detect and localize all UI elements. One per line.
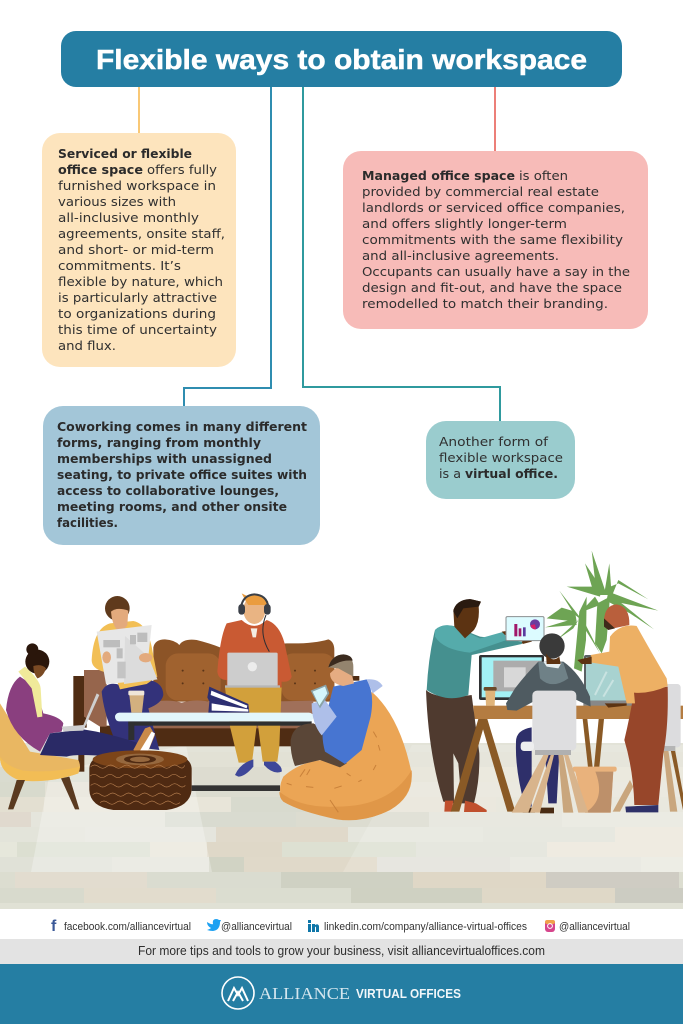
coffee table [115,713,313,791]
panel: virtual office [426,421,575,499]
illustration: lounge group [0,593,412,820]
panel: managed office: design and fit-out, and have the space [362,280,622,295]
panel: coworking: access to collaborative lounges, [57,484,279,498]
plant pot [573,719,617,813]
panel: virtual office: virtual office. [465,467,558,481]
man pointing at chart [426,599,534,812]
panel: serviced office: agreements, onsite staff, [58,226,225,241]
floor [0,743,683,909]
panel: virtual office: Another form of [439,434,549,449]
social links bar: facebook.com/alliancevirtual [64,921,191,933]
panel: coworking: forms, ranging from monthly [57,436,261,450]
panel: coworking: seating, to private office suites with [57,468,307,482]
beanbag with man and tablet [279,654,412,820]
footer with logo: ALLIANCE [259,984,350,1003]
tablet chart [506,617,544,641]
tire ottoman [89,750,192,810]
panel: coworking [43,406,320,545]
illustration: desk group [426,551,683,813]
website call to action [0,939,683,964]
footer with logo: VIRTUAL OFFICES [356,986,461,1001]
desk legs [451,719,515,812]
panel: serviced office: flexible by nature, which [58,274,223,289]
panel: serviced office: this time of uncertainty [58,322,218,337]
social links bar [0,909,683,939]
icon: alliance logo [222,977,254,1009]
sofa [73,639,359,772]
panel: managed office: landlords or serviced office companies, [362,200,625,215]
title banner: Flexible ways to obtain workspace [96,44,587,75]
title banner [61,31,622,87]
panel: serviced office: all-inclusive monthly [58,210,200,225]
second chair [613,684,683,812]
website call to action: For more tips and tools to grow your business, visit alliancevirtualoffices.com [138,944,545,958]
icon: facebook: f [51,918,57,935]
panel: serviced office: commitments. It’s [58,258,181,273]
panel: serviced office: offers fully [147,162,218,177]
panel: managed office: and all-inclusive agreements. [362,248,559,263]
binders [207,687,249,713]
monitor and laptop [479,655,634,706]
panel: managed office: Managed office space [362,169,515,183]
icon: linkedin [308,920,319,932]
panel: serviced office: Serviced or flexible [58,147,192,161]
person: woman with laptop in chair [0,643,155,809]
connector: serviced office line [138,87,140,133]
person: man with headphones and laptop [217,593,292,777]
connector: virtual office line [303,87,500,421]
panel: serviced office: and short- or mid-term [58,242,214,257]
panel: serviced office: to organizations during [58,306,216,321]
panel: managed office [343,151,648,329]
social links bar: linkedin.com/company/alliance-virtual-offices [324,921,527,933]
panel: coworking: Coworking comes in many different [57,420,307,434]
connector: managed office line [494,87,496,151]
seated man with hoodie and chair [506,633,591,813]
panel: managed office: is often [519,168,568,183]
panel: coworking: meeting rooms, and other onsite [57,500,287,514]
panel: coworking: facilities. [57,516,118,530]
man leaning on desk [577,604,668,812]
social links bar: @alliancevirtual [559,921,630,933]
icon: twitter [207,919,221,931]
social links bar: @alliancevirtual [221,921,292,933]
panel: managed office: provided by commercial real estate [362,184,599,199]
panel: serviced office: various sizes with [58,194,176,209]
potted palm plant [545,551,658,672]
desk [432,706,683,719]
panel: managed office: remodelled to match their branding. [362,296,608,311]
coffee cup [128,691,144,713]
panel: serviced office: and flux. [58,338,116,353]
panel: serviced office: furnished workspace in [58,178,216,193]
icon: instagram [545,920,555,932]
panel: serviced office: is particularly attractive [58,290,217,305]
footer with logo [0,964,683,1024]
person: reading newspaper [92,596,163,750]
panel: managed office: commitments with the same flexibility [362,232,624,247]
panel: coworking: memberships with unassigned [57,452,272,466]
panel: managed office: and offers slightly longer-term [362,216,567,231]
coffee cup on desk [484,687,497,706]
panel: serviced office [42,133,236,367]
panel: virtual office: flexible workspace [439,450,563,465]
connector: coworking line [184,87,271,406]
panel: virtual office: is a [439,466,461,481]
panel: serviced office: office space [58,163,143,177]
panel: managed office: Occupants can usually have a say in the [362,264,630,279]
